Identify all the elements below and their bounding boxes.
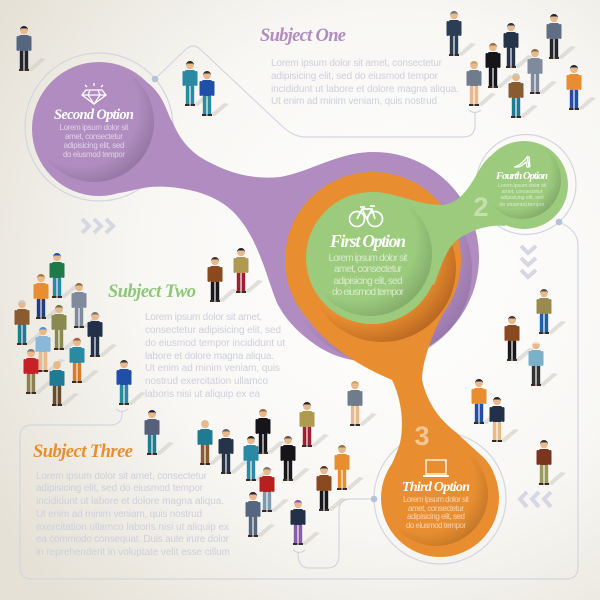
first option label	[328, 231, 408, 298]
fourth option label: adipisicing elit, sed	[500, 195, 544, 201]
first option label: Lorem ipsum dolor sit	[328, 253, 408, 264]
fourth option label: do eiusmod tempor	[500, 202, 545, 208]
first option label: amet, consectetur	[334, 264, 403, 275]
subject two text: do eiusmod tempor incididunt ut	[145, 338, 285, 349]
second option label: do eiusmod tempor	[63, 150, 125, 159]
subject two text: consectetur adipisicing elit, sed	[145, 325, 281, 336]
fourth option dimple	[483, 141, 561, 219]
panel: first and fourth option shape	[306, 141, 568, 324]
panel: third option dimple	[384, 442, 488, 546]
subject one text: Lorem ipsum dolor sit amet, consectetur	[271, 58, 443, 69]
people: right group	[472, 289, 566, 485]
second option label	[54, 107, 134, 159]
second option label: Second Option	[54, 107, 134, 123]
subject two text: laboris nisi ut aliquip ex ea	[145, 389, 260, 400]
first option dimple	[308, 192, 432, 316]
fourth option label	[495, 171, 548, 208]
number 3: 3	[414, 421, 430, 451]
subject three text: in reprehenderit in voluptate velit esse cillum	[36, 547, 230, 558]
second option label: amet, consectetur	[65, 132, 123, 141]
subject three text: Lorem ipsum dolor sit amet, consectetur	[36, 471, 208, 482]
panel: second option dimple	[34, 62, 154, 182]
subject two text: Ut enim ad minim veniam, quis	[145, 363, 280, 374]
third option label	[402, 480, 470, 530]
purple circle shadow	[288, 178, 472, 362]
people: top left police	[16, 26, 46, 71]
people: top right group	[446, 11, 596, 118]
fourth option label: Lorem ipsum dolor sit	[498, 183, 546, 189]
third option label: Lorem ipsum dolor sit	[403, 495, 470, 504]
second option label: Lorem ipsum dolor sit	[60, 123, 129, 132]
first option label: do eiusmod tempor	[332, 287, 405, 298]
subject one heading: Subject One	[260, 26, 346, 46]
number 2: 2	[473, 192, 489, 222]
subject three text: Ut enim ad minim veniam, quis nostrud	[36, 509, 202, 520]
subject three text: ea commodo consequat. Duis aute irure dolor	[36, 534, 230, 545]
subject one text: incididunt ut labore et dolore magna aliqua.	[271, 84, 459, 95]
subject one text: adipisicing elit, sed do eiusmod tempor	[271, 71, 439, 82]
subject two text: labore et dolore magna aliqua.	[145, 351, 274, 362]
panel: second option shape	[32, 62, 479, 362]
people: centre pair	[208, 248, 263, 302]
subject one text	[271, 58, 459, 107]
third option label: do eiusmod tempor	[406, 521, 466, 530]
connector dots	[152, 76, 562, 502]
subject three heading: Subject Three	[33, 442, 133, 462]
people: couple top centre	[182, 61, 229, 116]
first option label: adipisicing elit, sed	[334, 276, 402, 287]
subject three text	[36, 471, 230, 558]
icon: diamond	[82, 83, 106, 104]
subject two text: Lorem ipsum dolor sit amet,	[145, 312, 262, 323]
panel: third option shape	[285, 172, 499, 557]
chevrons right	[82, 219, 113, 233]
fourth option label: Fourth Option	[495, 171, 548, 182]
icon: laptop	[423, 460, 449, 476]
third option label: Third Option	[402, 480, 470, 495]
orange circle shadow	[308, 194, 456, 342]
chevrons left	[520, 492, 551, 507]
fourth option label: amet, consectetur	[502, 189, 543, 195]
icon: high heel shoe	[514, 157, 530, 167]
subject two text	[145, 312, 285, 400]
people: centre bottom group	[144, 381, 377, 545]
second option label: adipisicing elit, sed	[64, 141, 124, 150]
first option label: First Option	[329, 231, 406, 251]
third option label: amet, consectetur	[408, 504, 464, 513]
subject two heading: Subject Two	[108, 282, 196, 302]
people: left group	[14, 253, 146, 406]
subject three text: exercitation ullamco laboris nisi ut aliquip ex	[36, 522, 229, 533]
subject one text: Ut enim ad minim veniam, quis nostrud	[271, 96, 437, 107]
subject three text: incididunt ut labore et dolore magna aliqua.	[36, 496, 224, 507]
third option label: adipisicing elit, sed	[407, 512, 465, 521]
chevrons down	[521, 246, 536, 277]
icon: bicycle	[350, 206, 382, 226]
subject three text: adipisicing elit, sed do eiusmod tempor	[36, 483, 204, 494]
subject two text: nostrud exercitation ullamco	[145, 376, 268, 387]
